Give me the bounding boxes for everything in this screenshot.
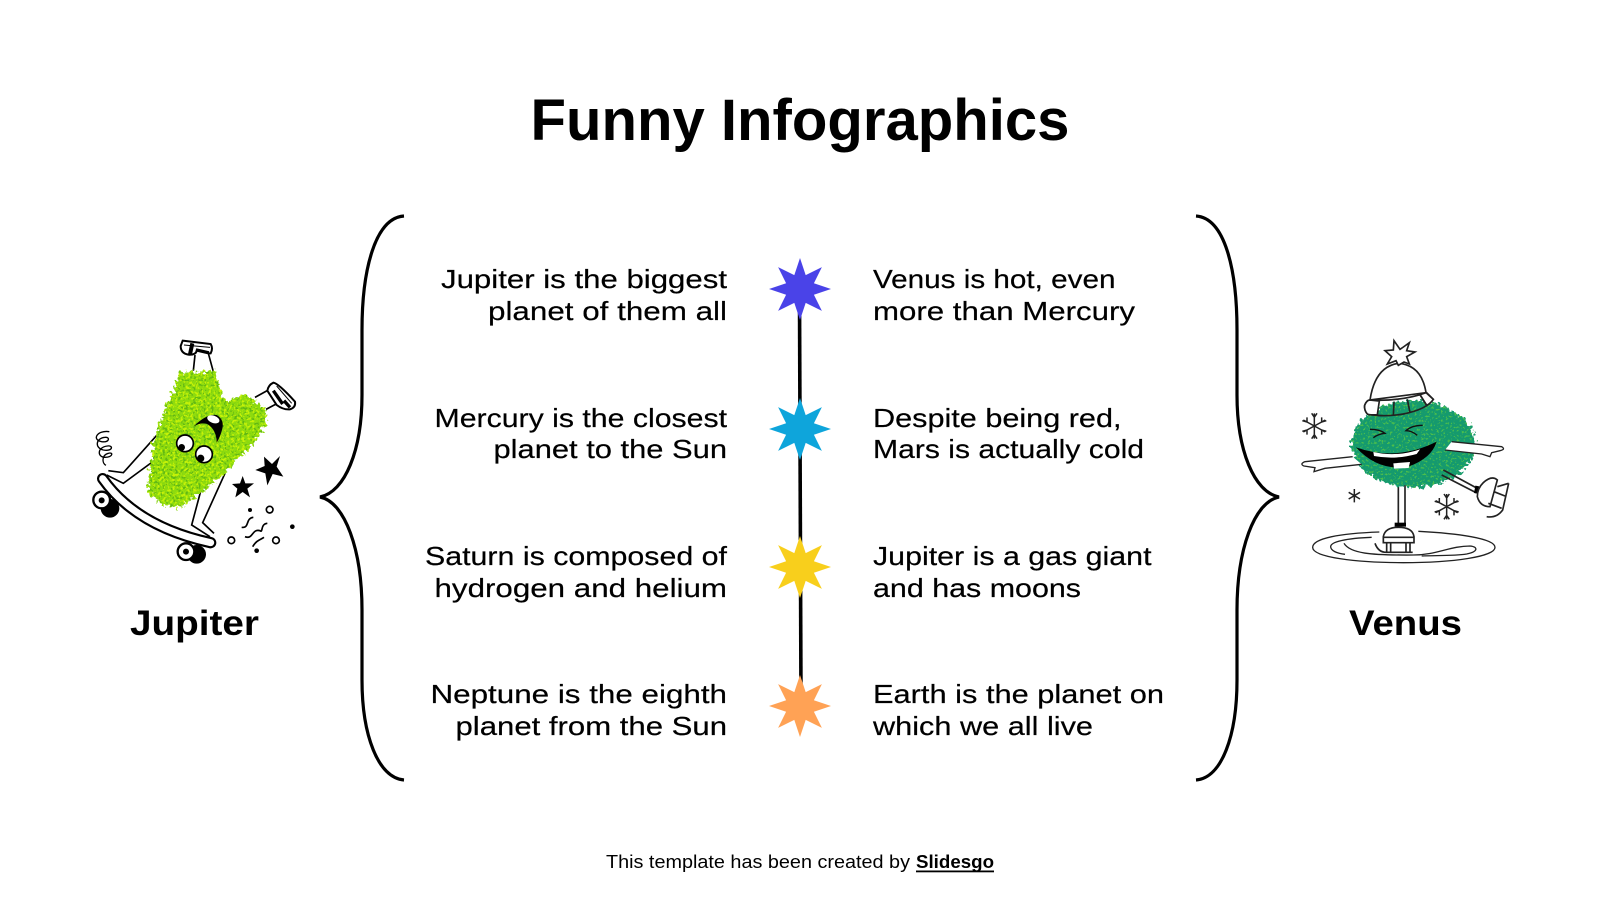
right text: row 2 — [873, 403, 1144, 464]
left brace — [320, 216, 404, 780]
right text: row 3: and has moons — [873, 573, 1081, 603]
star: cyan — [769, 398, 831, 460]
left text: row 3: hydrogen and helium — [434, 573, 727, 603]
stars — [232, 456, 283, 497]
right text: row 3 — [873, 541, 1152, 603]
skateboard — [93, 479, 211, 564]
right text: row 2: Despite being red, — [873, 403, 1122, 433]
standing leg and skate — [1375, 485, 1414, 552]
right brace — [1196, 216, 1279, 780]
panel: Jupiter character — [93, 341, 295, 564]
right text: row 1: more than Mercury — [873, 296, 1135, 326]
dots and squiggles — [228, 506, 295, 553]
label: Venus: Venus — [1349, 604, 1462, 643]
ice rink — [1313, 531, 1495, 563]
mouth — [1356, 442, 1437, 469]
left text: row 3 — [425, 541, 728, 603]
star: blue — [769, 258, 831, 320]
footer credit: This template has been created by — [606, 852, 910, 872]
green body — [147, 371, 267, 507]
raised leg and skate — [1442, 470, 1509, 517]
laughing eyes — [1370, 425, 1423, 438]
left text: row 4 — [430, 679, 727, 741]
left text: row 2 — [434, 403, 728, 464]
right text: row 4: which we all live — [872, 711, 1093, 741]
title: Funny Infographics — [530, 88, 1070, 153]
mouth — [193, 414, 223, 443]
star: yellow — [769, 536, 831, 598]
left text: row 4: Neptune is the eighth — [430, 679, 727, 709]
right text: row 2: Mars is actually cold — [873, 434, 1144, 464]
green body — [1351, 401, 1475, 487]
right text: row 1: Venus is hot, even — [873, 264, 1116, 294]
left text: row 2: planet to the Sun — [494, 434, 727, 464]
eyes — [177, 435, 212, 463]
left text: row 3: Saturn is composed of — [425, 541, 728, 571]
right text: row 3: Jupiter is a gas giant — [873, 541, 1152, 571]
center connector line — [800, 295, 801, 700]
star: orange — [769, 675, 831, 737]
arms — [1302, 442, 1503, 472]
panel: Venus character — [1302, 341, 1509, 563]
left text: row 2: Mercury is the closest — [434, 403, 728, 433]
legs and shoes — [107, 341, 295, 537]
pompom — [1385, 341, 1415, 365]
right text: row 4 — [872, 679, 1164, 741]
left text: row 1: planet of them all — [488, 296, 727, 326]
label: Jupiter: Jupiter — [130, 604, 259, 643]
left text: row 1 — [441, 264, 728, 326]
hat — [1365, 363, 1433, 416]
left text: row 1: Jupiter is the biggest — [441, 264, 728, 294]
right text: row 4: Earth is the planet on — [873, 679, 1164, 709]
footer credit: Slidesgo — [916, 852, 994, 872]
snowflakes — [1302, 413, 1459, 519]
left text: row 4: planet from the Sun — [456, 711, 727, 741]
spring squiggle — [96, 431, 112, 465]
right text: row 1 — [873, 264, 1135, 326]
